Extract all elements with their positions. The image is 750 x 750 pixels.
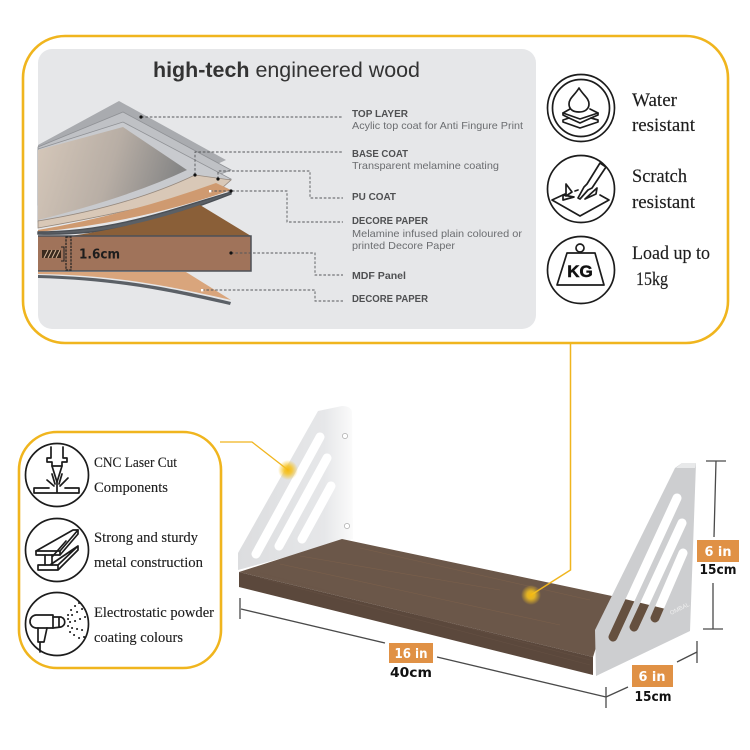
icon: CNC laser [26, 444, 88, 506]
text: strong metal: Strong and sturdy [94, 530, 199, 546]
icon: steel I-beam [26, 518, 88, 582]
wooden board [239, 539, 612, 675]
layer labels: MDF Panel [352, 270, 406, 282]
layer labels: BASE COAT [352, 148, 409, 160]
layer labels: Acylic top coat for Anti Fingure Print [352, 120, 523, 132]
dimension: height 6 in [697, 461, 739, 629]
diagram: wood layers: 1.6cm [79, 248, 120, 262]
dimension: depth 6 in: 6 in [638, 669, 666, 685]
text: scratch resistant [632, 167, 696, 213]
text: powder coating [94, 605, 214, 646]
right bracket [595, 463, 696, 676]
dimension: height 6 in: 6 in [704, 544, 732, 560]
dimension: width 16 in: 16 in [394, 646, 428, 662]
text: CNC laser cut: CNC Laser Cut [94, 455, 177, 471]
text: load capacity: Load up to [632, 244, 710, 264]
left bracket [238, 406, 353, 570]
heading: high-tech engineered wood [153, 59, 420, 82]
text: powder coating: Electrostatic powder [94, 605, 214, 621]
dimension: width 16 in: 40cm [390, 665, 432, 681]
dimension: depth 6 in: 15cm [634, 689, 672, 705]
text: powder coating: coating colours [94, 630, 183, 646]
layer labels: DECORE PAPER [352, 293, 428, 305]
text: scratch resistant: resistant [632, 193, 696, 213]
text: CNC laser cut: Components [94, 480, 168, 496]
dimension: depth 6 in [606, 641, 697, 705]
icon: powder spray gun [26, 592, 88, 656]
panel: metal features frame [19, 432, 221, 668]
text: load capacity [632, 244, 710, 290]
shelf illustration [238, 406, 696, 676]
panel: engineered wood callout frame [23, 36, 728, 343]
connector: top panel to shelf [521, 343, 570, 605]
layer labels: printed Decore Paper [352, 240, 456, 252]
layer labels: Melamine infused plain coloured or [352, 228, 523, 240]
text: water resistant [632, 91, 696, 136]
right bracket: OMBAL [669, 602, 691, 617]
dimension: height 6 in: 15cm [700, 562, 736, 578]
layer labels: TOP LAYER [352, 108, 408, 120]
connector: metal panel to bracket [220, 442, 298, 480]
icon: load weight [548, 236, 614, 304]
dimension: width 16 in [240, 598, 606, 708]
layer labels [352, 108, 523, 305]
layer labels: DECORE PAPER [352, 215, 428, 227]
leader lines [139, 115, 343, 301]
icon: scratch resistant [548, 156, 614, 222]
text: scratch resistant: Scratch [632, 167, 687, 187]
icon: water resistant [548, 74, 614, 142]
icon: load weight: KG [567, 262, 593, 281]
layer labels: PU COAT [352, 191, 397, 203]
layer labels: Transparent melamine coating [352, 160, 499, 172]
text: water resistant: Water [632, 91, 677, 111]
diagram: wood layers [38, 101, 251, 305]
panel: grey layers diagram background [38, 49, 536, 329]
text: strong metal: metal construction [94, 555, 204, 571]
text: CNC laser cut [94, 455, 177, 496]
text: load capacity: 15kg [636, 270, 668, 290]
text: water resistant: resistant [632, 116, 696, 136]
text: strong metal [94, 530, 204, 571]
